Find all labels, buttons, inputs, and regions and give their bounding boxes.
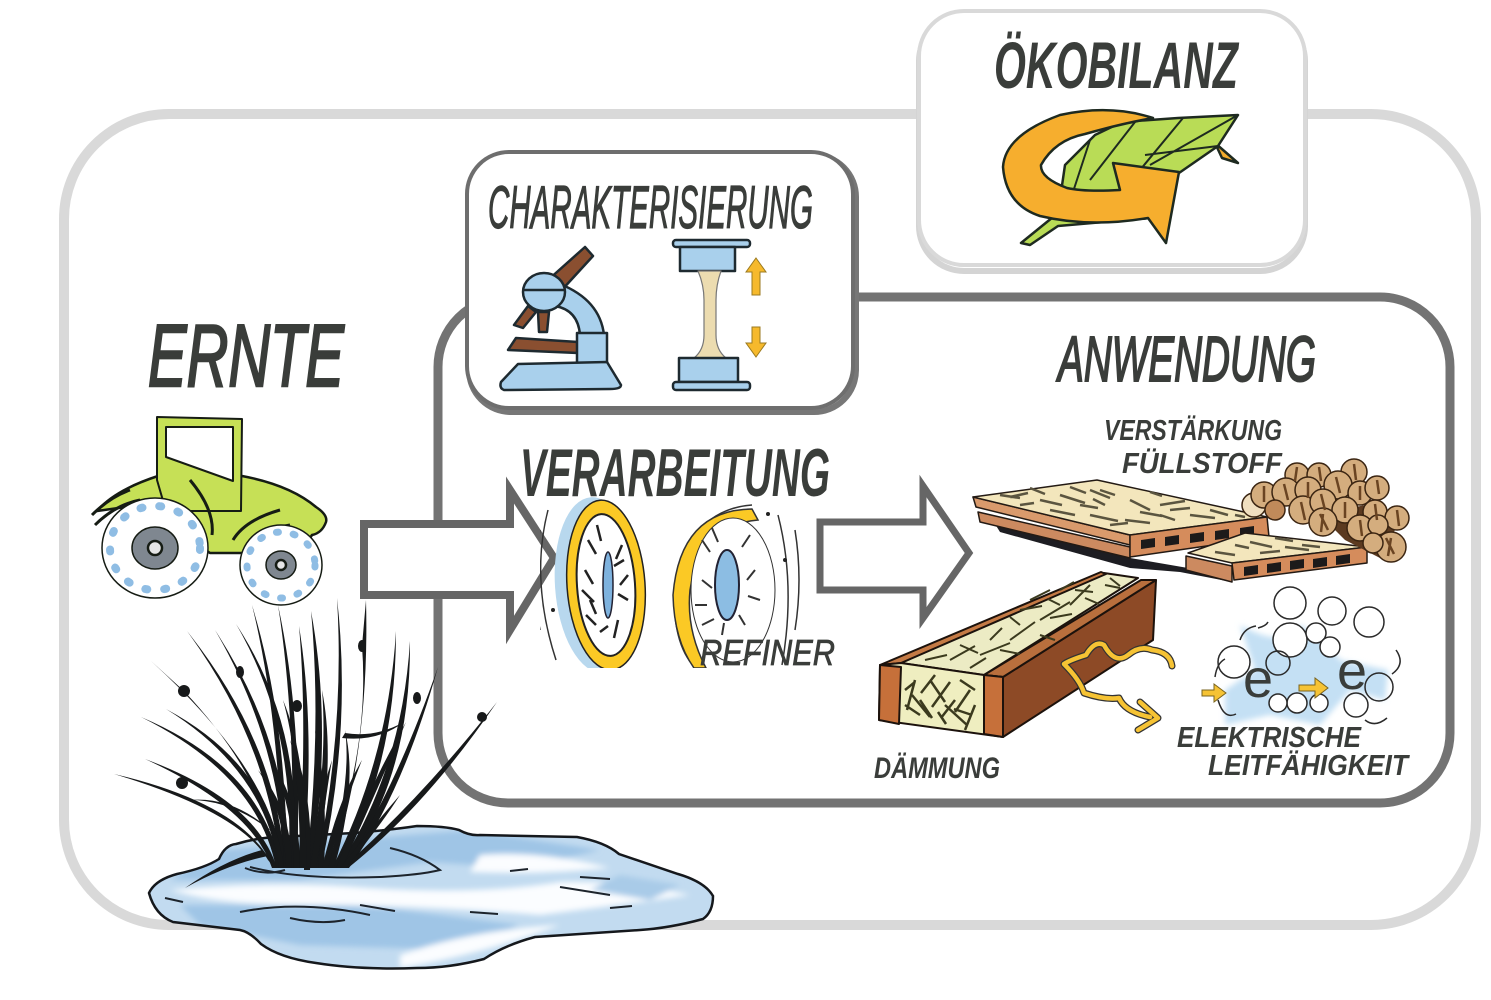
label: Verstärkung Füllstoff: FÜLLSTOFF bbox=[1122, 447, 1283, 480]
arrow: harvest to processing bbox=[364, 490, 554, 630]
panel: outer life cycle frame bbox=[64, 114, 1476, 925]
heading: Verarbeitung: VERARBEITUNG bbox=[520, 435, 830, 511]
label: Elektrische Leitfähigkeit bbox=[1177, 722, 1410, 782]
label: Refiner: REFINER bbox=[700, 632, 835, 673]
icon: pile of wood spheres bbox=[1242, 459, 1409, 562]
label: Verstärkung Füllstoff bbox=[1104, 414, 1283, 480]
icon: pond bbox=[149, 826, 713, 968]
icon: microscope bbox=[500, 247, 621, 390]
label: Elektrische Leitfähigkeit: LEITFÄHIGKEIT bbox=[1208, 749, 1410, 782]
icon: refiner discs bbox=[535, 494, 799, 676]
icon: tractor bbox=[92, 417, 326, 605]
panel: Charakterisierung: CHARAKTERISIERUNG bbox=[488, 174, 813, 241]
icon: conductive particles: e bbox=[1243, 649, 1273, 709]
label: Verstärkung Füllstoff: VERSTÄRKUNG bbox=[1104, 414, 1282, 447]
panel: Ökobilanz bbox=[919, 11, 1305, 271]
icon: tensile test specimen bbox=[673, 240, 750, 390]
heading: Ernte: ERNTE bbox=[148, 306, 345, 405]
label: Elektrische Leitfähigkeit: ELEKTRISCHE bbox=[1177, 722, 1362, 754]
arrow: processing to application bbox=[820, 486, 969, 618]
icon: heat flow wavy arrow bbox=[1064, 644, 1172, 730]
icon: leaf and recycling arrow bbox=[1003, 110, 1238, 245]
icon: conductive particles bbox=[1202, 587, 1400, 725]
icon: insulation beam bbox=[879, 572, 1156, 737]
icon: tension arrows bbox=[746, 258, 766, 357]
heading: Anwendung: ANWENDUNG bbox=[1056, 323, 1316, 395]
icon: conductive particles: e bbox=[1337, 641, 1367, 701]
label: Dämmung: DÄMMUNG bbox=[874, 752, 1000, 785]
panel: Charakterisierung bbox=[467, 152, 856, 412]
panel: Anwendung process frame bbox=[438, 297, 1450, 803]
icon: fibre boards bbox=[973, 480, 1367, 582]
icon: reed plant bbox=[114, 598, 497, 888]
heading: Ökobilanz: ÖKOBILANZ bbox=[994, 28, 1240, 102]
